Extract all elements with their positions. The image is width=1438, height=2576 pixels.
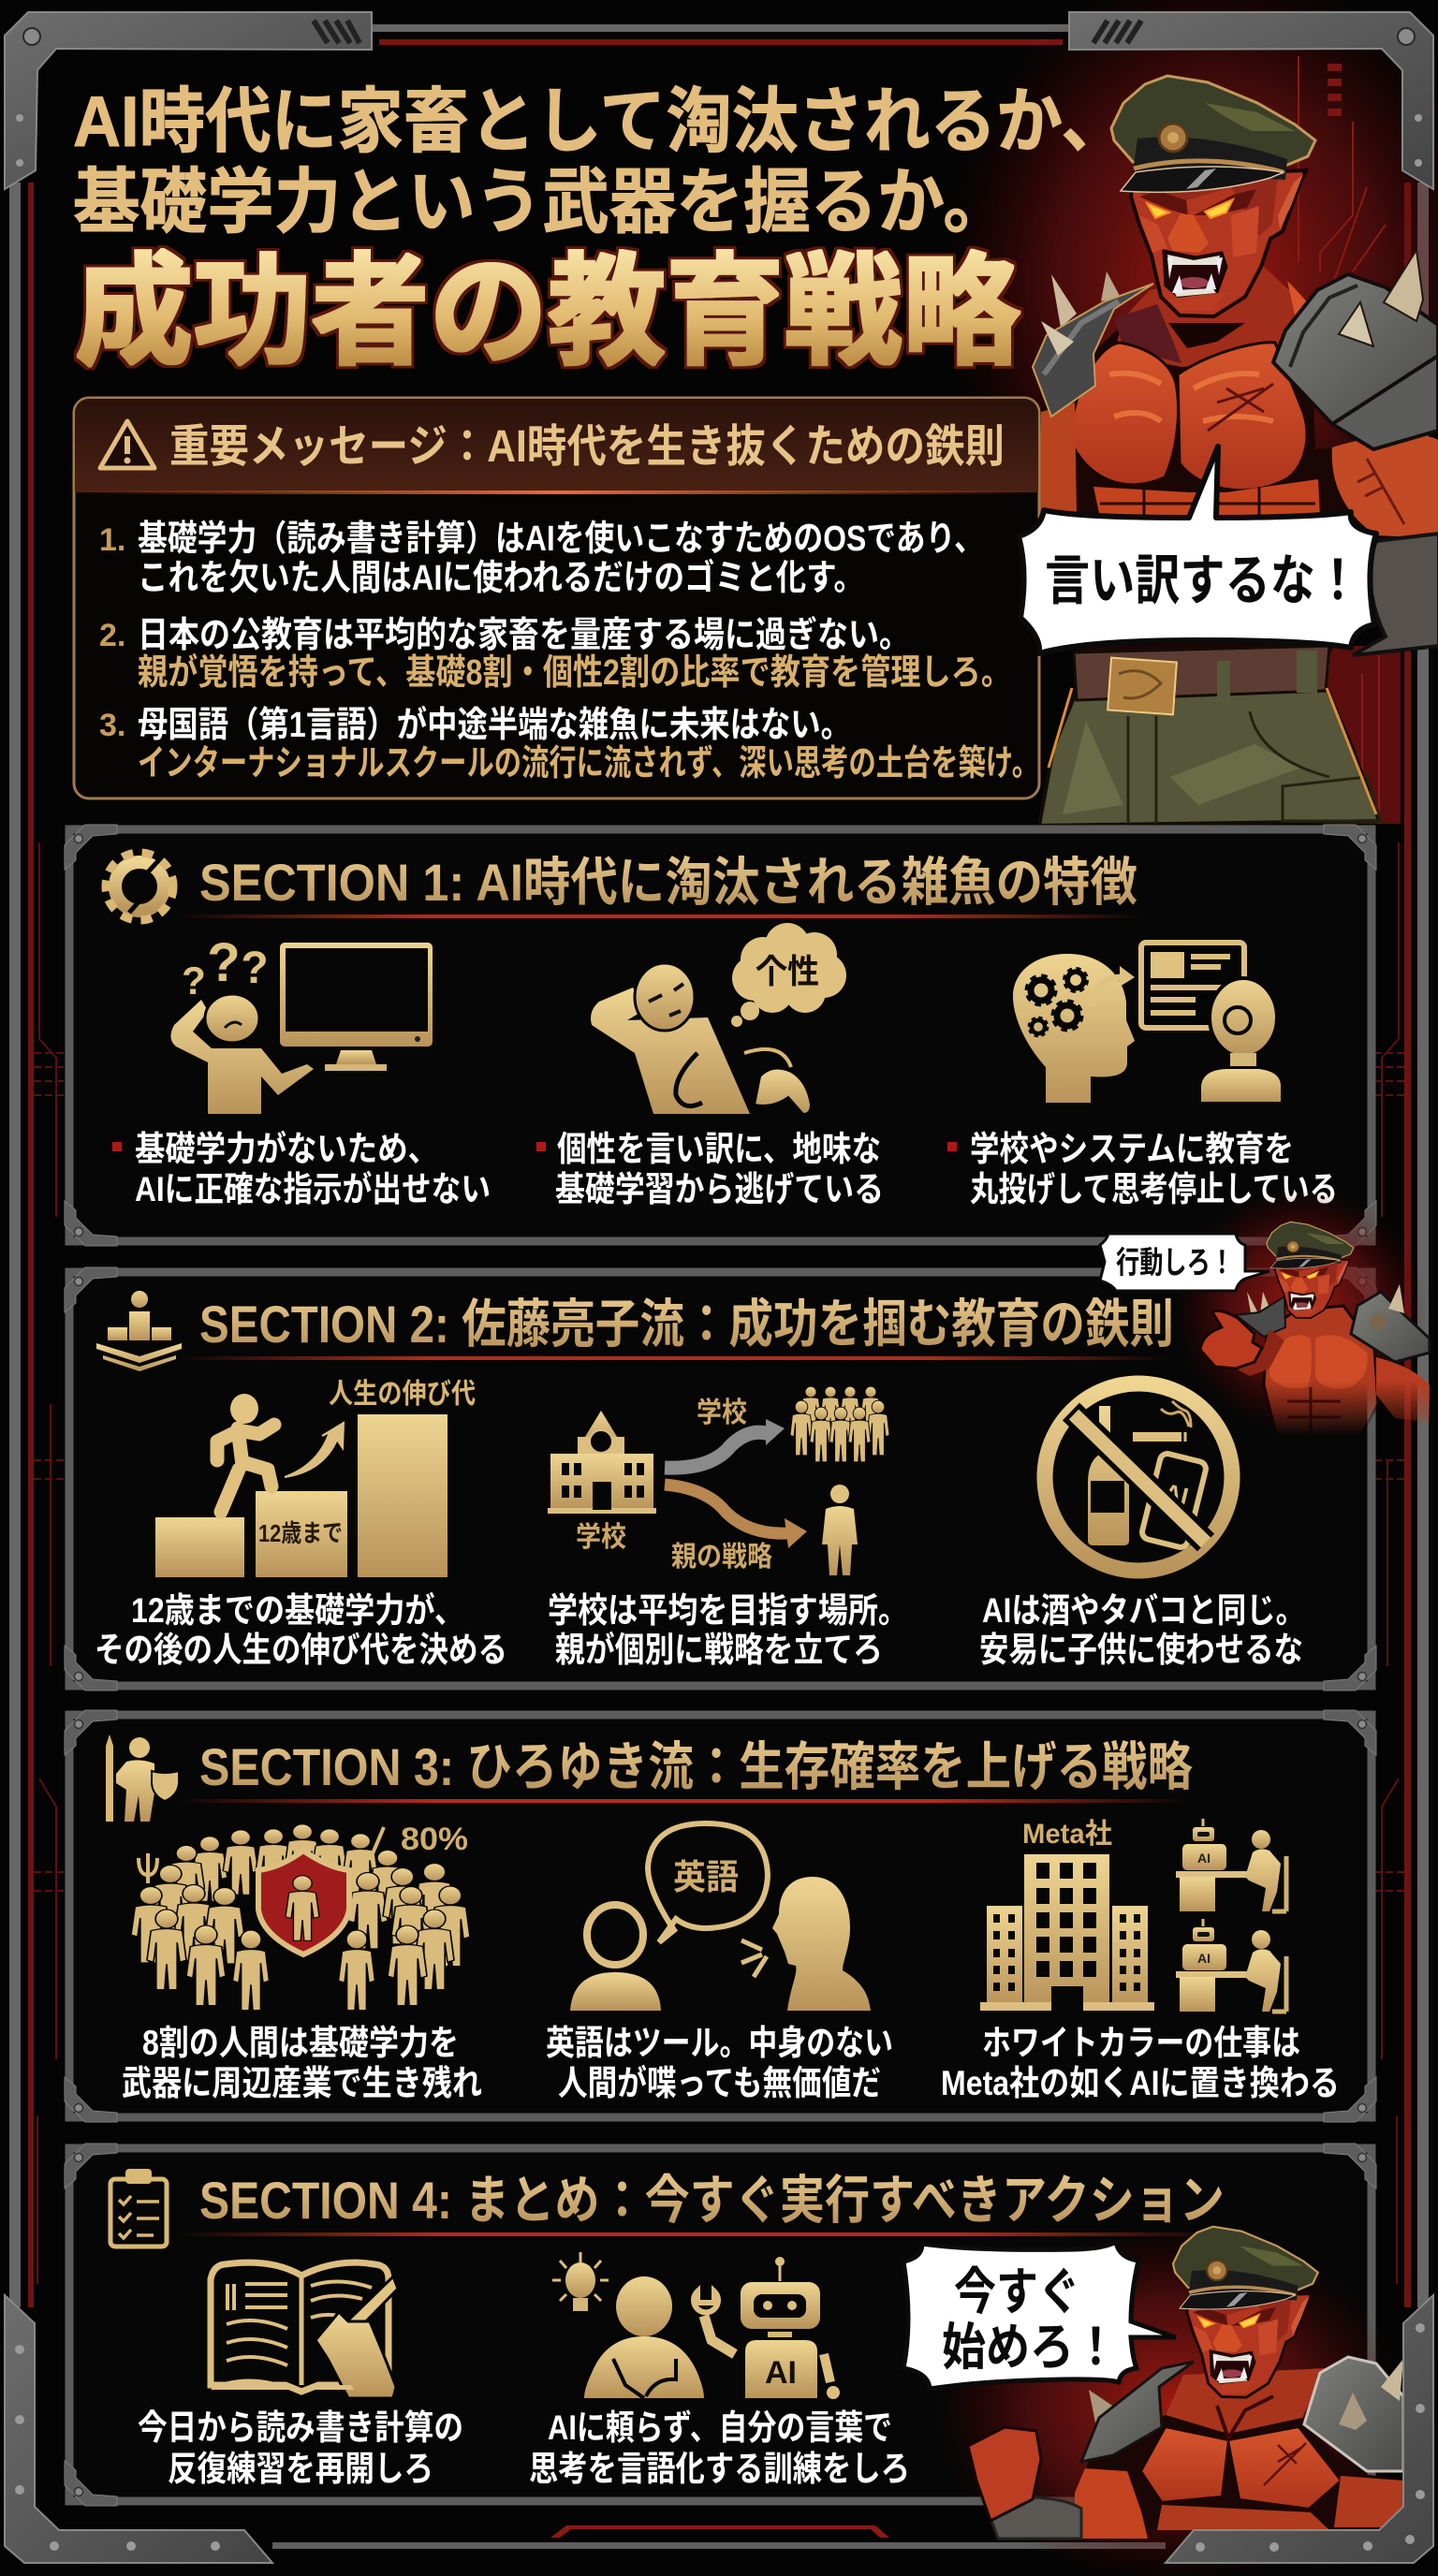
character: large demon officer [1033, 76, 1438, 826]
section 2 items: AIは酒やタバコと同じ。 [982, 1591, 1305, 1630]
message list: これを欠いた人間はAIに使われるだけのゴミと化す。 [138, 559, 864, 598]
key message heading: 重要メッセージ：AI時代を生き抜くための鉄則 [169, 422, 1005, 472]
demon torso [1039, 267, 1438, 669]
icon: corporate building with robots replacing workers [980, 1819, 1286, 2012]
section 2 items: 学校は平均を目指す場所。 [548, 1591, 908, 1630]
section 4 heading: SECTION 4: まとめ：今すぐ実行すべきアクション [199, 2171, 1225, 2230]
icon: growth staircase with runner: 人生の伸び代 [329, 1379, 476, 1410]
icon: school splitting into two paths: 親の戦略 [671, 1542, 772, 1573]
icon: clipboard [110, 2170, 167, 2247]
section 2 heading: SECTION 2: 佐藤亮子流：成功を掴む教育の鉄則 [199, 1295, 1174, 1354]
section 1 items: 基礎学力がないため、 [135, 1130, 438, 1168]
section 2 items: 安易に子供に使わせるな [979, 1631, 1303, 1669]
icon: person and robot collaborating [552, 2252, 840, 2399]
icon: podium pyramid [96, 1291, 182, 1371]
panel: section 1 [65, 825, 1376, 1246]
icon: school splitting into two paths [548, 1386, 889, 1575]
section 4 items: 今日から読み書き計算の [138, 2408, 463, 2447]
character: demon with raised fist [936, 2227, 1404, 2576]
section 3 items: 英語はツール。中身のない [546, 2024, 893, 2062]
section 3 items [122, 2024, 1340, 2102]
icon: speaker and listener with speech bubble: 英語 [673, 1858, 739, 1896]
pointing demon pauldrons [1236, 1284, 1430, 1362]
speech bubble: 今すぐ始めろ [903, 2242, 1176, 2389]
section 1 items: 丸投げして思考停止している [970, 1170, 1338, 1208]
icon: growth staircase with runner: 12歳まで [258, 1519, 343, 1547]
icon: broken gear [106, 853, 173, 920]
icon: slacking person with game controller [591, 923, 846, 1114]
message list: 基礎学力（読み書き計算）はAIを使いこなすためのOSであり、 [138, 520, 984, 559]
icon: open book and writing hand [211, 2262, 398, 2398]
section 2 items: その後の人生の伸び代を決める [95, 1631, 507, 1669]
section 1 items: 学校やシステムに教育を [970, 1130, 1294, 1168]
section 2 items: 親が個別に戦略を立てろ [555, 1631, 883, 1669]
demon right pauldron [1273, 250, 1438, 449]
section 3 heading: SECTION 3: ひろゆき流：生存確率を上げる戦略 [199, 1737, 1193, 1796]
demon head with officer cap [1111, 76, 1315, 316]
panel: section 3 [65, 1710, 1376, 2122]
pointing demon forearm [1236, 1329, 1284, 1376]
section 1 items: 個性を言い訳に、地味な [557, 1130, 881, 1168]
message list: 2. [99, 618, 125, 653]
icon: school splitting into two paths: 学校 [697, 1398, 747, 1428]
icon: crowd around shield [131, 1822, 470, 2011]
demon pants shading [1063, 721, 1301, 814]
frame corner plate: top right [1069, 12, 1433, 189]
icon: speaker and listener with speech bubble [570, 1823, 871, 2011]
frame corner plate: bottom left [5, 2295, 272, 2563]
demon pants [1039, 688, 1379, 826]
message list [99, 520, 1039, 783]
icon: crowd around shield: 80% [401, 1822, 468, 1857]
message list: 日本の公教育は平均的な家畜を量産する場に過ぎない。 [138, 616, 910, 655]
icon: confused person at monitor: ? [182, 959, 206, 1003]
message list: インターナショナルスクールの流行に流されず、深い思考の土台を築け。 [138, 744, 1039, 783]
icon: prohibition of alcohol tobacco and AI phone: AI [1161, 1478, 1191, 1511]
section 2 items [95, 1591, 1305, 1669]
message list: 母国語（第1言語）が中途半端な雑魚に未来はない。 [138, 706, 851, 745]
icon: slacking person with game controller: 个性 [756, 952, 819, 990]
character: pointing demon [1175, 1189, 1430, 1442]
speech bubble: 言い訳するな [1019, 446, 1376, 653]
demon belt and buckle [1049, 646, 1376, 814]
icon: growth staircase with runner [155, 1379, 476, 1577]
pointing demon hand [1200, 1310, 1262, 1368]
section 3 items: 8割の人間は基礎学力を [142, 2024, 459, 2062]
icon: confused person at monitor [170, 932, 433, 1114]
section 3 items: ホワイトカラーの仕事は [982, 2024, 1300, 2062]
fist demon pauldrons [1081, 2357, 1403, 2471]
message list: 1. [99, 522, 125, 558]
icon: spear and shield figure [106, 1734, 179, 1822]
speech bubble: 今すぐ始めろ: 始めろ！ [942, 2320, 1118, 2376]
icon: person and robot collaborating: AI [765, 2355, 797, 2391]
circuit board background traces [34, 842, 1404, 2284]
icon: warning triangle [100, 421, 154, 468]
pointing demon body [1264, 1306, 1430, 1442]
panel: section 2 [65, 1267, 1376, 1690]
pointing demon head [1267, 1222, 1354, 1318]
section 4 items: AIに頼らず、自分の言葉で [548, 2408, 892, 2447]
icon: corporate building with robots replacing workers: Meta社 [1022, 1819, 1112, 1850]
fist demon arm and torso [1075, 2368, 1403, 2539]
fist demon gauntlet [990, 2497, 1081, 2539]
frame corner plate: bottom right [1166, 2295, 1433, 2563]
message list: 3. [99, 708, 125, 743]
panel: section 4 [65, 2144, 1376, 2506]
speech bubble: 行動しろ: 行動しろ！ [1116, 1245, 1234, 1280]
speech bubble: 今すぐ始めろ: 今すぐ [954, 2264, 1080, 2320]
section 1 items: AIに正確な指示が出せない [135, 1170, 491, 1208]
section 3 items: 人間が喋っても無価値だ [558, 2064, 881, 2102]
icon: school splitting into two paths: 学校 [576, 1522, 626, 1553]
demon background glow [946, 0, 1438, 824]
section 3 items: Meta社の如くAIに置き換わる [941, 2064, 1340, 2102]
title: second line: 基礎学力という武器を握るか。 [73, 163, 1010, 242]
demon pants seams [1128, 711, 1381, 824]
section 1 heading: SECTION 1: AI時代に淘汰される雑魚の特徴 [199, 853, 1137, 912]
section 4 items: 思考を言語化する訓練をしろ [529, 2450, 910, 2488]
panel: key message [74, 398, 1039, 798]
speech bubble: 行動しろ [1100, 1234, 1269, 1291]
frame corner plate: top left [5, 12, 372, 189]
message list: 親が覚悟を持って、基礎8割・個性2割の比率で教育を管理しろ。 [138, 653, 1011, 693]
icon: head with gears handing off to robot [1013, 943, 1281, 1103]
icon: confused person at monitor: ? [241, 944, 269, 993]
fist demon hand [968, 2427, 1041, 2521]
section 4 items [138, 2408, 910, 2488]
icon: confused person at monitor: ? [207, 932, 241, 993]
icon: prohibition of alcohol tobacco and AI phone [1045, 1383, 1232, 1571]
section 2 items: 12歳までの基礎学力が、 [131, 1591, 464, 1630]
fist demon head [1173, 2227, 1318, 2397]
section 3 items: 武器に周辺産業で生き残れ [122, 2064, 482, 2102]
section 1 items: 基礎学習から逃げている [555, 1170, 884, 1208]
demon left pauldron [1033, 271, 1153, 417]
section 1 items [112, 1130, 1338, 1208]
title: main headline: 成功者の教育戦略 [75, 243, 1020, 380]
title: first line: AI時代に家畜として淘汰されるか、 [73, 82, 1127, 162]
speech bubble: 言い訳するな: 言い訳するな！ [1045, 550, 1360, 611]
section 4 items: 反復練習を再開しろ [168, 2450, 433, 2488]
